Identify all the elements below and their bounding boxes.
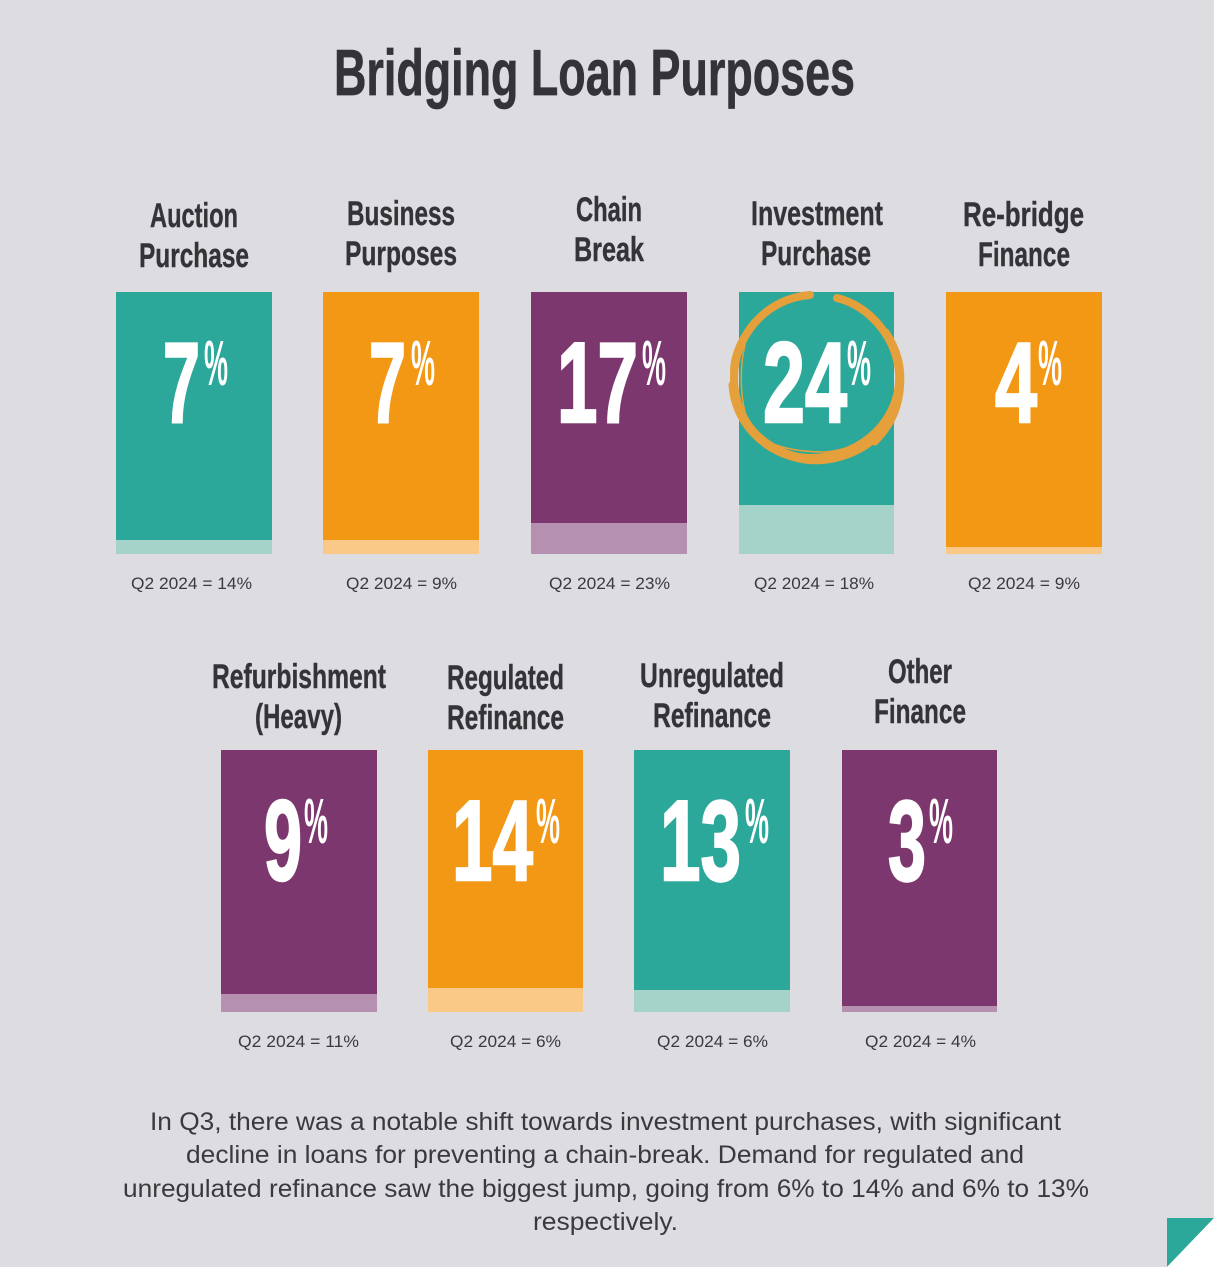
panel: Business Purposes: % xyxy=(411,327,435,399)
icon: hand-drawn highlight circle xyxy=(733,295,901,460)
icon: corner fold xyxy=(1167,1218,1214,1267)
panel: Other Finance: Other xyxy=(888,653,952,691)
panel: Other Finance xyxy=(842,653,997,1051)
panel: Chain Break xyxy=(531,191,687,593)
panel: Unregulated Refinance: % xyxy=(745,785,769,857)
panel: Auction Purchase: Purchase xyxy=(139,237,249,275)
panel: Auction Purchase: % xyxy=(204,327,228,399)
panel: Investment Purchase: Q2 2024 = 18% xyxy=(754,574,874,593)
panel: Auction Purchase: Q2 2024 = 14% xyxy=(131,574,252,593)
panel: Other Finance: % xyxy=(929,785,953,857)
panel: Chain Break: Q2 2024 = 23% xyxy=(549,574,670,593)
panel: Re-bridge Finance xyxy=(946,196,1102,593)
panel: Refurbishment (Heavy): 9 xyxy=(264,778,302,905)
panel: Investment Purchase: Investment xyxy=(751,195,883,233)
panel: Other Finance: 3 xyxy=(888,778,926,905)
panel: Investment Purchase xyxy=(739,195,894,593)
panel: Refurbishment (Heavy): Refurbishment xyxy=(212,658,386,696)
panel: Regulated Refinance: Refinance xyxy=(447,699,564,737)
text block: commentary: In Q3, there was a notable shift towards investment purchases, with significant xyxy=(150,1108,1061,1136)
text block: commentary xyxy=(123,1108,1089,1236)
panel: Refurbishment (Heavy): (Heavy) xyxy=(255,698,342,736)
panel: Re-bridge Finance: 4 xyxy=(995,320,1037,447)
panel: Re-bridge Finance: Re-bridge xyxy=(963,196,1084,234)
panel: Chain Break: 17 xyxy=(557,320,638,447)
panel: Unregulated Refinance: Q2 2024 = 6% xyxy=(657,1032,768,1051)
panel: Regulated Refinance: % xyxy=(536,785,560,857)
panel: Regulated Refinance: 14 xyxy=(452,778,533,905)
panel: Regulated Refinance xyxy=(428,659,583,1051)
panel: Auction Purchase: 7 xyxy=(163,320,200,447)
panel: Auction Purchase: Auction xyxy=(150,197,238,235)
panel: Business Purposes xyxy=(323,195,479,593)
panel: Unregulated Refinance: Refinance xyxy=(653,697,771,735)
panel: Regulated Refinance: Q2 2024 = 6% xyxy=(450,1032,561,1051)
panel: Regulated Refinance: Regulated xyxy=(447,659,564,697)
panel: Business Purposes: Q2 2024 = 9% xyxy=(346,574,457,593)
panel: Business Purposes: Purposes xyxy=(345,235,457,273)
panel: Business Purposes: 7 xyxy=(369,320,406,447)
panel: Refurbishment (Heavy): Q2 2024 = 11% xyxy=(238,1032,359,1051)
panel: Unregulated Refinance: 13 xyxy=(660,778,741,905)
panel: Investment Purchase: % xyxy=(847,327,871,399)
title: Bridging Loan Purposes xyxy=(334,36,855,109)
panel: Chain Break: Chain xyxy=(576,191,642,229)
panel: Unregulated Refinance xyxy=(634,657,790,1051)
panel: Business Purposes: Business xyxy=(347,195,455,233)
panel: Re-bridge Finance: Finance xyxy=(978,236,1070,274)
text block: commentary: respectively. xyxy=(533,1208,678,1236)
text block: commentary: unregulated refinance saw the biggest jump, going from 6% to 14% and 6% to 13% xyxy=(123,1175,1089,1203)
panel: Auction Purchase xyxy=(116,197,272,593)
panel: Investment Purchase: Purchase xyxy=(761,235,871,273)
panel: Unregulated Refinance: Unregulated xyxy=(640,657,784,695)
panel: Re-bridge Finance: % xyxy=(1038,327,1062,399)
panel: Chain Break: Break xyxy=(574,231,644,269)
text block: commentary: decline in loans for preventing a chain-break. Demand for regulated and xyxy=(186,1141,1024,1169)
panel: Re-bridge Finance: Q2 2024 = 9% xyxy=(968,574,1080,593)
panel: Refurbishment (Heavy): % xyxy=(304,785,328,857)
panel: Refurbishment (Heavy) xyxy=(212,658,386,1051)
panel: Investment Purchase: 24 xyxy=(763,320,847,447)
panel: Other Finance: Q2 2024 = 4% xyxy=(865,1032,976,1051)
panel: Chain Break: % xyxy=(642,327,666,399)
panel: Other Finance: Finance xyxy=(874,693,966,731)
